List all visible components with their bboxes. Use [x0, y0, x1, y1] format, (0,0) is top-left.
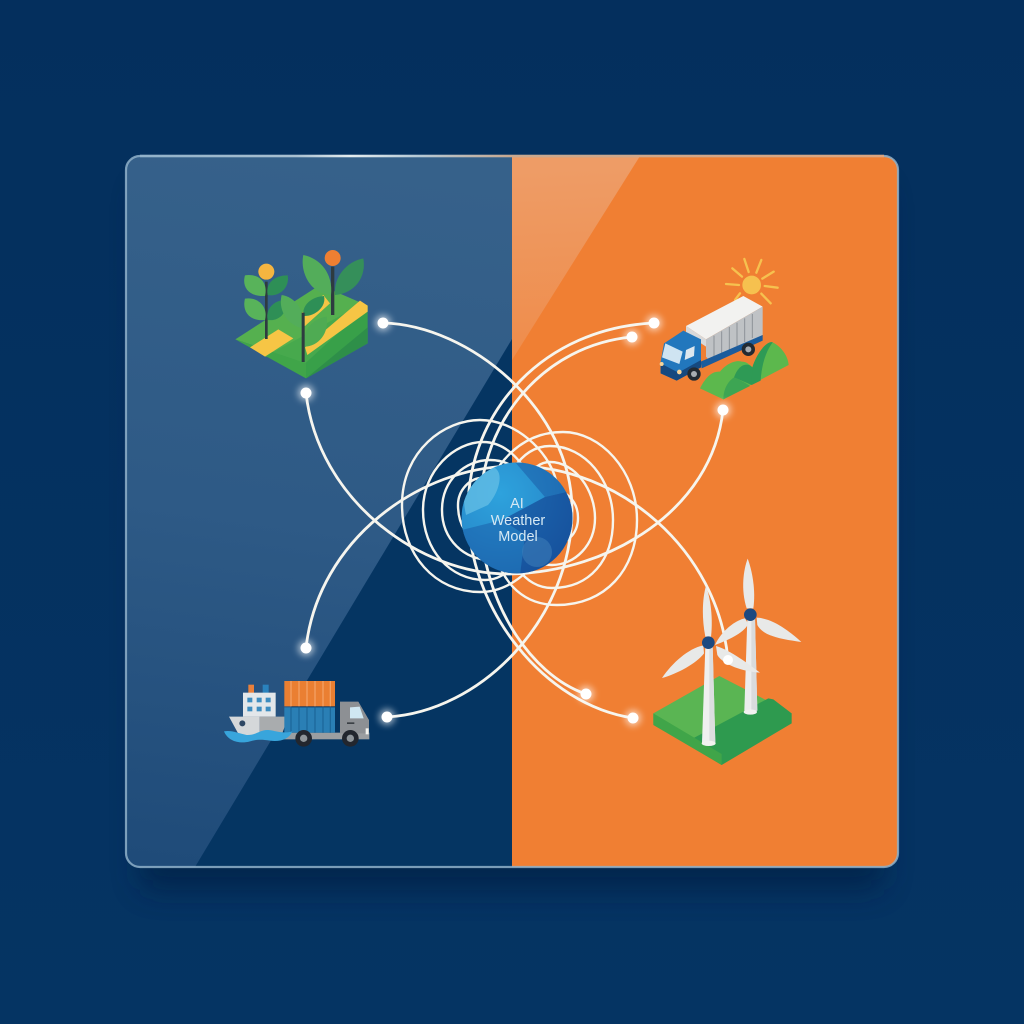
ground: [653, 676, 792, 754]
endpoint nodes: [298, 315, 733, 726]
sphere label line 3: Model: [498, 529, 538, 545]
globe: [461, 462, 575, 575]
central sphere: AI Weather Model: [461, 462, 575, 575]
front turbine: [662, 586, 760, 746]
chassis: [701, 335, 763, 368]
curve: truck to turbine base: [468, 323, 654, 718]
icon: delivery truck with sun and hills: [660, 259, 789, 399]
panel border left and bottom: [126, 156, 898, 867]
panel: navy left half: [196, 340, 512, 866]
funnels: [248, 685, 254, 693]
right rings: [491, 432, 637, 605]
blue container: [284, 707, 335, 733]
panel shadow: [140, 185, 884, 890]
connection curves: [306, 323, 728, 718]
wheels: [687, 367, 701, 381]
orange container: [284, 681, 335, 706]
waves: [224, 730, 292, 742]
glass reflection right: [512, 156, 640, 360]
left rings: [402, 420, 557, 592]
hills: [700, 342, 789, 399]
node dots: [300, 318, 733, 724]
icon: wind turbines on green plot: [653, 559, 801, 765]
ship hull: [229, 717, 260, 735]
icon: farm plot with plants: [235, 250, 368, 378]
curve: farm to shipping: [383, 323, 572, 717]
concentric rings: [402, 420, 637, 605]
panel: orange right half: [512, 156, 898, 867]
truck cab: [340, 702, 369, 733]
curve: shipping upper to turbine: [306, 466, 728, 660]
sphere label: AI: [510, 496, 524, 512]
truck chassis: [283, 733, 369, 739]
glass reflection left: [126, 156, 512, 867]
panel border top highlight: [140, 155, 884, 157]
panel: split glass board: [126, 156, 898, 867]
sun: [726, 259, 778, 303]
curve: farm lower to truck lower: [306, 393, 723, 574]
cargo box: [686, 296, 763, 339]
curve: truck inner to turbine inner: [480, 337, 632, 694]
icon: container ship and truck: [224, 681, 369, 747]
cab: [661, 331, 701, 381]
rear turbine: [715, 559, 801, 715]
ship superstructure: [243, 693, 276, 717]
wheels: [295, 730, 312, 747]
sphere label line 2: Weather: [491, 513, 545, 529]
node glow: [298, 315, 731, 726]
